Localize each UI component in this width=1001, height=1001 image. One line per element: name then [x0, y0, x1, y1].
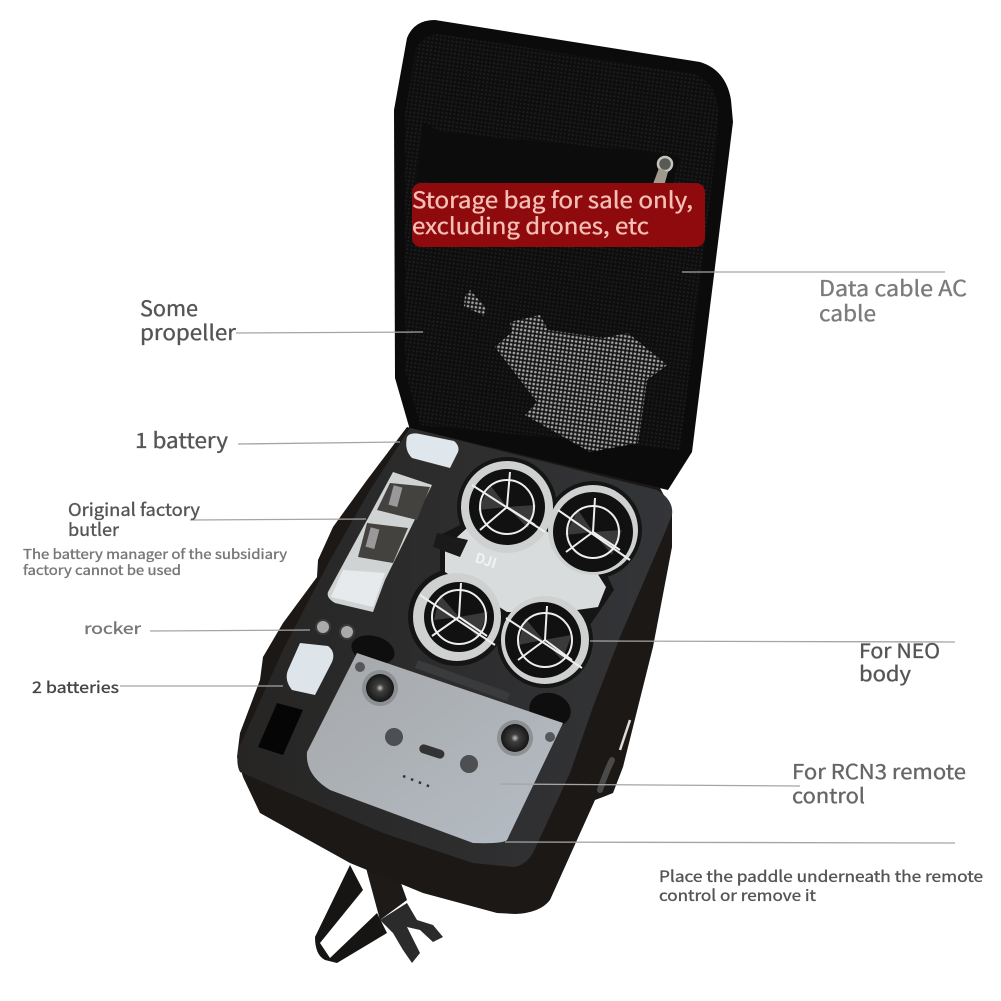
drone body	[413, 461, 638, 684]
label: some propeller: propeller	[140, 317, 237, 347]
side strap highlight	[600, 720, 630, 790]
label: data cable	[819, 272, 967, 328]
label: paddle note	[659, 865, 983, 906]
drone body: DJI	[473, 548, 499, 573]
slot	[258, 703, 303, 755]
note: battery manager	[23, 543, 287, 579]
drone recess	[408, 457, 642, 688]
leader lines	[120, 272, 955, 843]
label: for NEO body: body	[859, 658, 912, 687]
label: rocker: rocker	[84, 615, 142, 639]
remote control	[307, 653, 563, 843]
note: battery manager: The battery manager of the subsidiary	[23, 543, 287, 563]
battery top	[406, 433, 458, 468]
propeller guard 4	[501, 596, 589, 684]
red notice banner: Storage bag for sale only,	[412, 183, 693, 215]
foam tray	[237, 428, 672, 867]
label: for RCN3 remote control	[792, 755, 966, 809]
label: data cable: Data cable AC	[819, 272, 967, 303]
red notice banner	[412, 183, 705, 247]
two batteries	[287, 643, 333, 695]
note: battery manager: factory cannot be used	[23, 559, 181, 579]
propeller guard 2	[548, 485, 638, 575]
label: for NEO body: For NEO	[859, 635, 940, 664]
label: original factory butler: butler	[68, 517, 119, 542]
label: 2 batteries: 2 batteries	[32, 674, 119, 698]
label: paddle note: control or remove it	[659, 884, 816, 906]
label: some propeller: Some	[140, 293, 198, 323]
label: for NEO body	[859, 635, 940, 687]
label: some propeller	[140, 293, 237, 347]
bag shell	[237, 427, 672, 914]
propeller guard 3	[413, 573, 501, 661]
bag lid with mesh	[394, 20, 733, 490]
propeller guard 1	[461, 461, 553, 553]
label: paddle note: Place the paddle underneath the remote	[659, 865, 983, 887]
label: data cable: cable	[819, 297, 876, 328]
bottom strap and buckle	[315, 827, 443, 963]
label: original factory butler	[68, 497, 200, 542]
zipper pull	[647, 157, 672, 200]
rockers	[315, 619, 355, 640]
label: for RCN3 remote control: control	[792, 779, 865, 809]
remote recesses	[348, 631, 398, 669]
label: 1 battery: 1 battery	[135, 425, 228, 455]
label: for RCN3 remote control: For RCN3 remote	[792, 755, 966, 785]
factory butler hub	[328, 472, 432, 612]
label: original factory butler: Original factory	[68, 497, 200, 522]
mesh pocket contents	[464, 290, 667, 452]
red notice banner: excluding drones, etc	[412, 209, 649, 241]
